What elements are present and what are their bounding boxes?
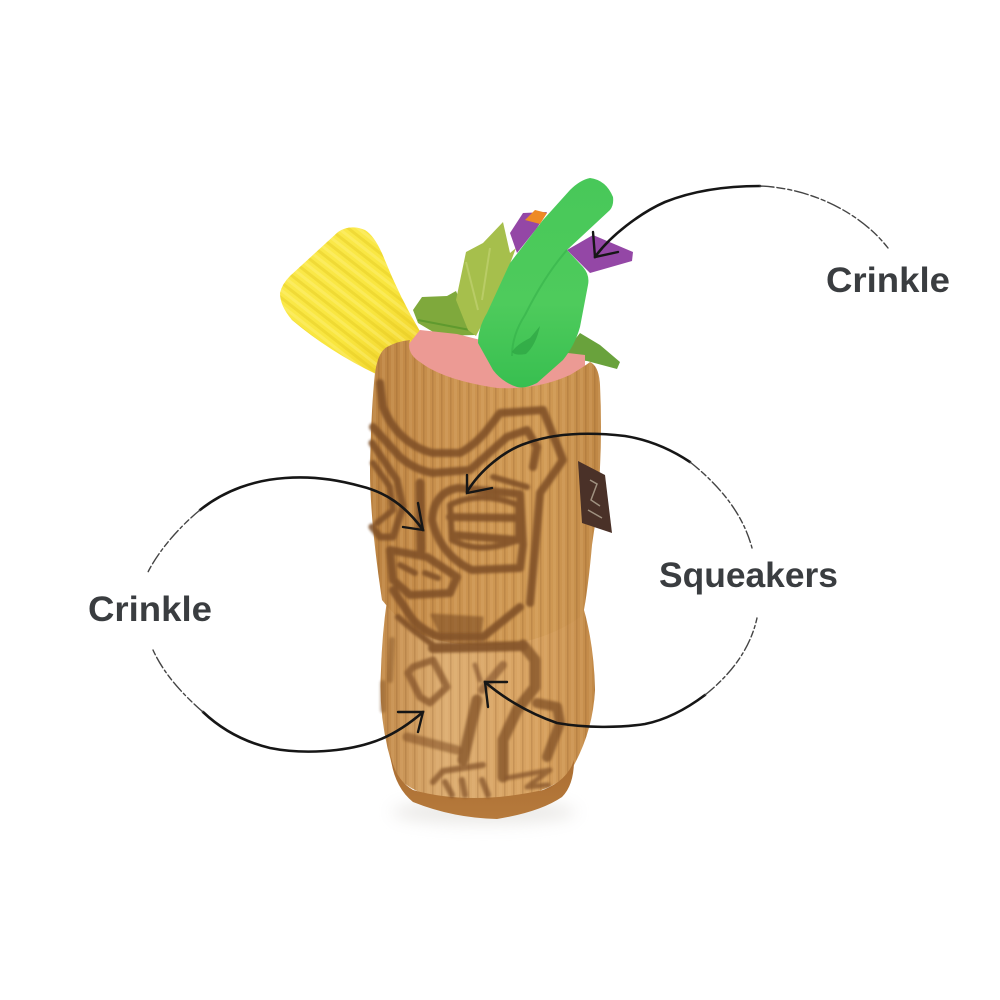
tiki face drawing <box>372 383 563 795</box>
arrow: left crinkle upper <box>148 477 423 572</box>
label: squeakers: Squeakers <box>659 556 838 595</box>
base <box>390 750 574 819</box>
arrow: squeakers upper <box>467 434 752 548</box>
plush tiki toy <box>280 178 633 824</box>
yellow umbrella <box>280 227 421 374</box>
arrow: squeakers lower <box>485 618 757 727</box>
flower centre <box>525 210 547 224</box>
label: top crinkle: Crinkle <box>826 261 950 300</box>
base shadow <box>392 800 576 824</box>
lower cup body <box>380 600 595 802</box>
arrow: left crinkle lower <box>153 650 423 752</box>
purple flower <box>510 210 633 273</box>
leaves <box>413 222 620 369</box>
arrow: top crinkle <box>593 186 888 257</box>
green straw <box>478 178 613 388</box>
upper cup body <box>370 340 601 646</box>
fabric tag <box>578 461 612 533</box>
pink filling <box>400 330 585 395</box>
label: left crinkle: Crinkle <box>88 590 212 629</box>
